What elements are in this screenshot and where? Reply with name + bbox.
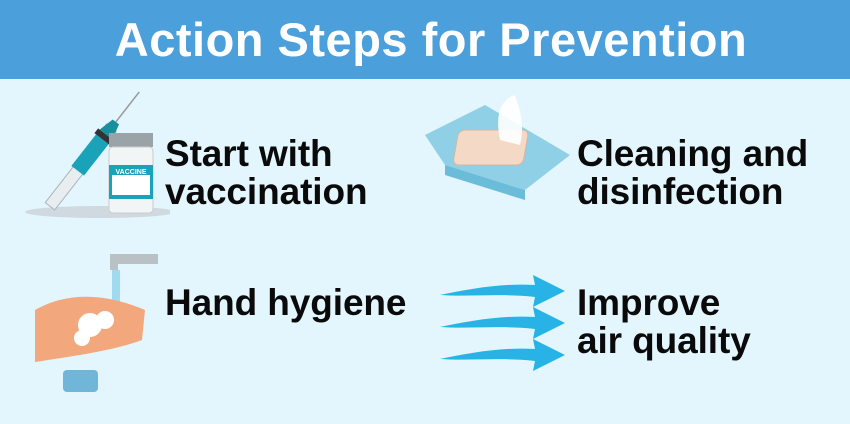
icon: wipes pack xyxy=(425,95,570,200)
text: vaccination: vaccination xyxy=(165,171,367,212)
text: air quality: air quality xyxy=(577,320,751,361)
text: air quality: Improve xyxy=(577,282,720,323)
icon: syringe and vaccine xyxy=(25,92,170,218)
icon: syringe and vaccine: VACCINE xyxy=(116,169,147,176)
text: air quality xyxy=(577,282,751,361)
header xyxy=(0,0,850,79)
text: vaccination: Start with xyxy=(165,133,333,174)
icon: hand washing xyxy=(35,254,158,392)
text: cleaning: disinfection xyxy=(577,171,783,212)
text: vaccination xyxy=(165,133,367,212)
header: Action Steps for Prevention xyxy=(115,13,747,66)
text: hand hygiene: Hand hygiene xyxy=(165,282,406,323)
text: cleaning xyxy=(577,133,808,212)
text: cleaning: Cleaning and xyxy=(577,133,808,174)
icon: air arrows xyxy=(440,275,565,371)
